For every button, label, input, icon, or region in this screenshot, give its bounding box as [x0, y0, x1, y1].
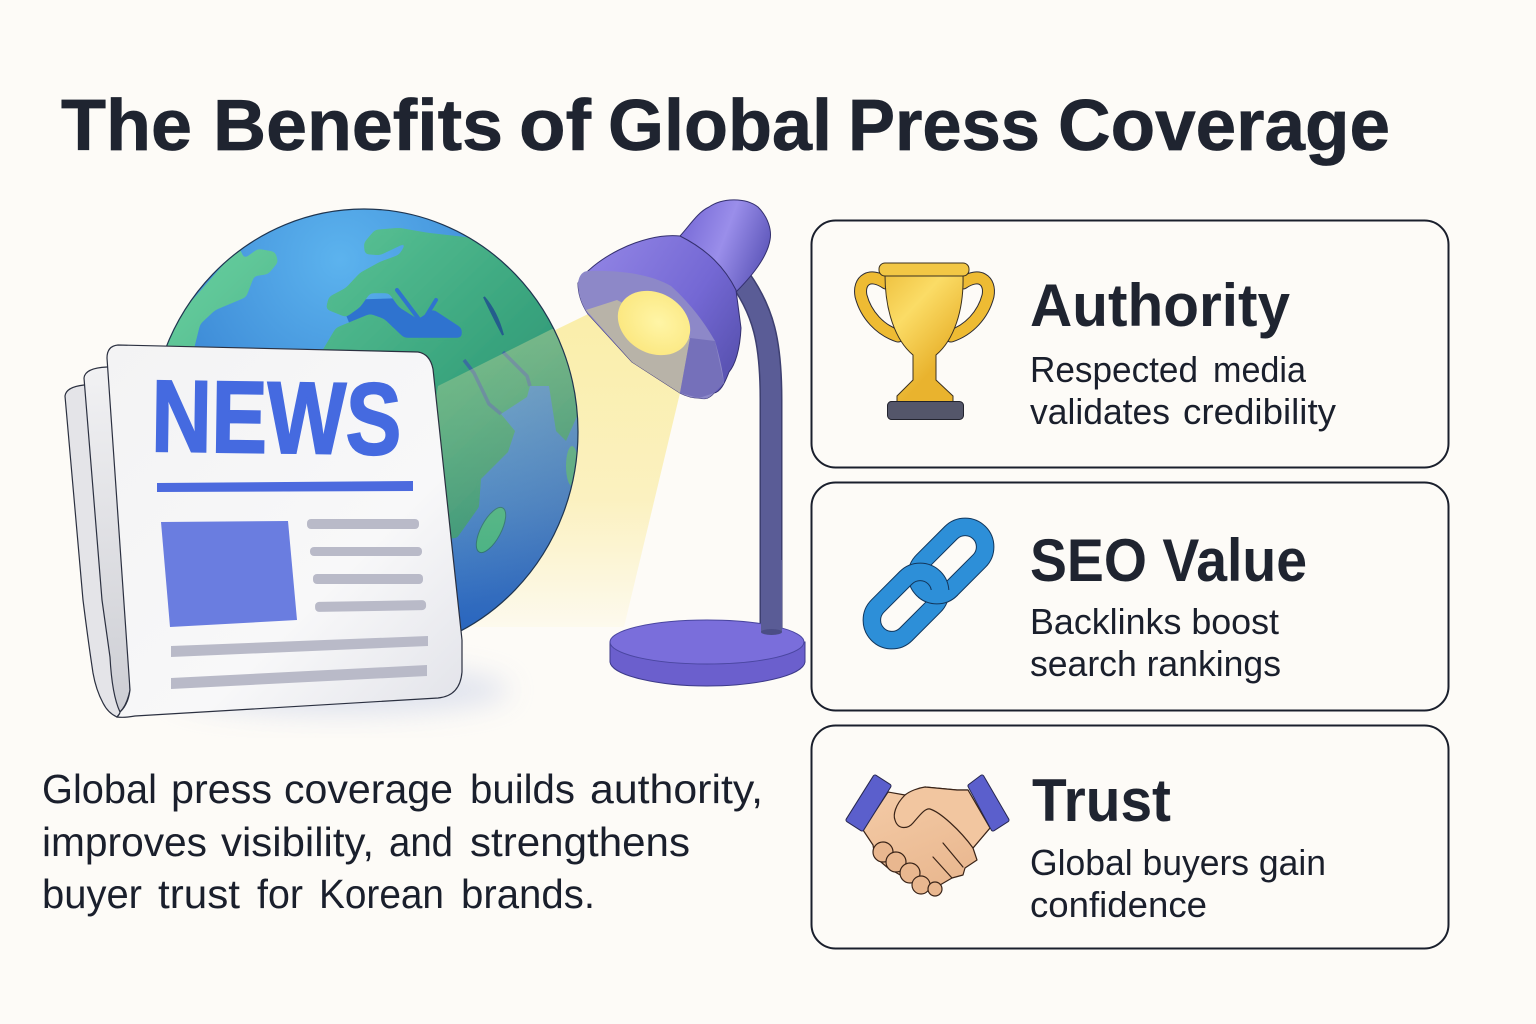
heading: authority: Authority: [1030, 272, 1291, 339]
title: The: [61, 86, 192, 166]
description: authority: media: [1213, 349, 1307, 390]
intro paragraph: improves: [42, 819, 207, 865]
headline bar: [157, 481, 413, 492]
title: Benefits: [213, 86, 503, 166]
intro paragraph: press: [171, 766, 272, 812]
panel: trust: [812, 726, 1448, 948]
illustration: globe, newspaper and lamp: [65, 200, 805, 717]
panel: authority: [812, 220, 1448, 468]
masthead: NEWS: NEWS: [151, 359, 402, 477]
intro paragraph: and: [389, 819, 453, 865]
title: of: [519, 86, 592, 166]
intro paragraph: Global: [42, 766, 157, 812]
intro paragraph: brands.: [461, 871, 595, 917]
beam tint over globe: [436, 329, 578, 590]
text lines: [171, 519, 428, 689]
heading: trust: Trust: [1032, 767, 1171, 834]
lit right interior: [680, 338, 724, 398]
lamp: [578, 200, 805, 686]
intro paragraph: [42, 766, 763, 917]
description: authority: validates: [1030, 391, 1170, 432]
intro paragraph: strengthens: [470, 819, 690, 865]
title: Coverage: [1058, 86, 1390, 166]
lit interior: [586, 300, 690, 393]
heading: seo value: SEO Value: [1030, 527, 1307, 594]
lamp base: [610, 642, 805, 686]
intro paragraph: coverage: [284, 766, 453, 812]
icon: chain link: [864, 519, 993, 648]
back page 1: [84, 367, 130, 712]
title: Global: [608, 86, 832, 166]
land: americas: [140, 247, 278, 360]
intro paragraph: buyer: [42, 871, 142, 917]
description: seo value: search rankings: [1030, 643, 1281, 684]
lamp shade: [578, 236, 741, 399]
land: europe and asia: [326, 228, 595, 600]
newspaper: [65, 345, 462, 717]
land: right edge island: [566, 446, 576, 486]
land: africa: [323, 314, 485, 538]
description: trust: Global buyers gain: [1030, 842, 1326, 883]
intro paragraph: visibility,: [221, 819, 374, 865]
sea: persian gulf: [503, 352, 530, 386]
description: authority: Respected: [1030, 349, 1198, 390]
intro paragraph: trust: [158, 871, 241, 917]
icon: trophy: [861, 263, 988, 420]
intro paragraph: for: [257, 871, 303, 917]
bulb: [606, 278, 702, 368]
lamp arm: [735, 272, 771, 632]
sea: indian ocean: [458, 386, 578, 600]
sea: caspian: [484, 297, 503, 335]
sea: europe slits: [397, 290, 436, 318]
panel: seo value: [812, 482, 1448, 710]
description: authority: credibility: [1183, 391, 1336, 432]
globe: [166, 208, 579, 632]
description: seo value: Backlinks boost: [1030, 601, 1279, 642]
icon: handshake: [848, 777, 1007, 896]
lamp opening: [578, 271, 724, 399]
sea: mediterranean: [346, 298, 462, 338]
shadow under newspaper: [170, 666, 510, 714]
sea: red sea: [464, 360, 501, 414]
back page 2: [65, 385, 130, 717]
description: trust: [1030, 842, 1326, 925]
description: authority: [1030, 349, 1336, 432]
description: trust: confidence: [1030, 884, 1207, 925]
intro paragraph: Korean: [319, 871, 444, 917]
title: [61, 86, 1390, 166]
intro paragraph: authority,: [590, 766, 763, 812]
title: Press: [848, 86, 1040, 166]
front page: [107, 345, 462, 717]
land: madagascar: [476, 506, 506, 554]
cuffs: [848, 777, 889, 829]
lamp neck: [680, 200, 770, 292]
intro paragraph: builds: [470, 766, 575, 812]
description: seo value: [1030, 601, 1281, 684]
light beam behind globe: [440, 300, 680, 627]
photo placeholder: [161, 521, 297, 627]
